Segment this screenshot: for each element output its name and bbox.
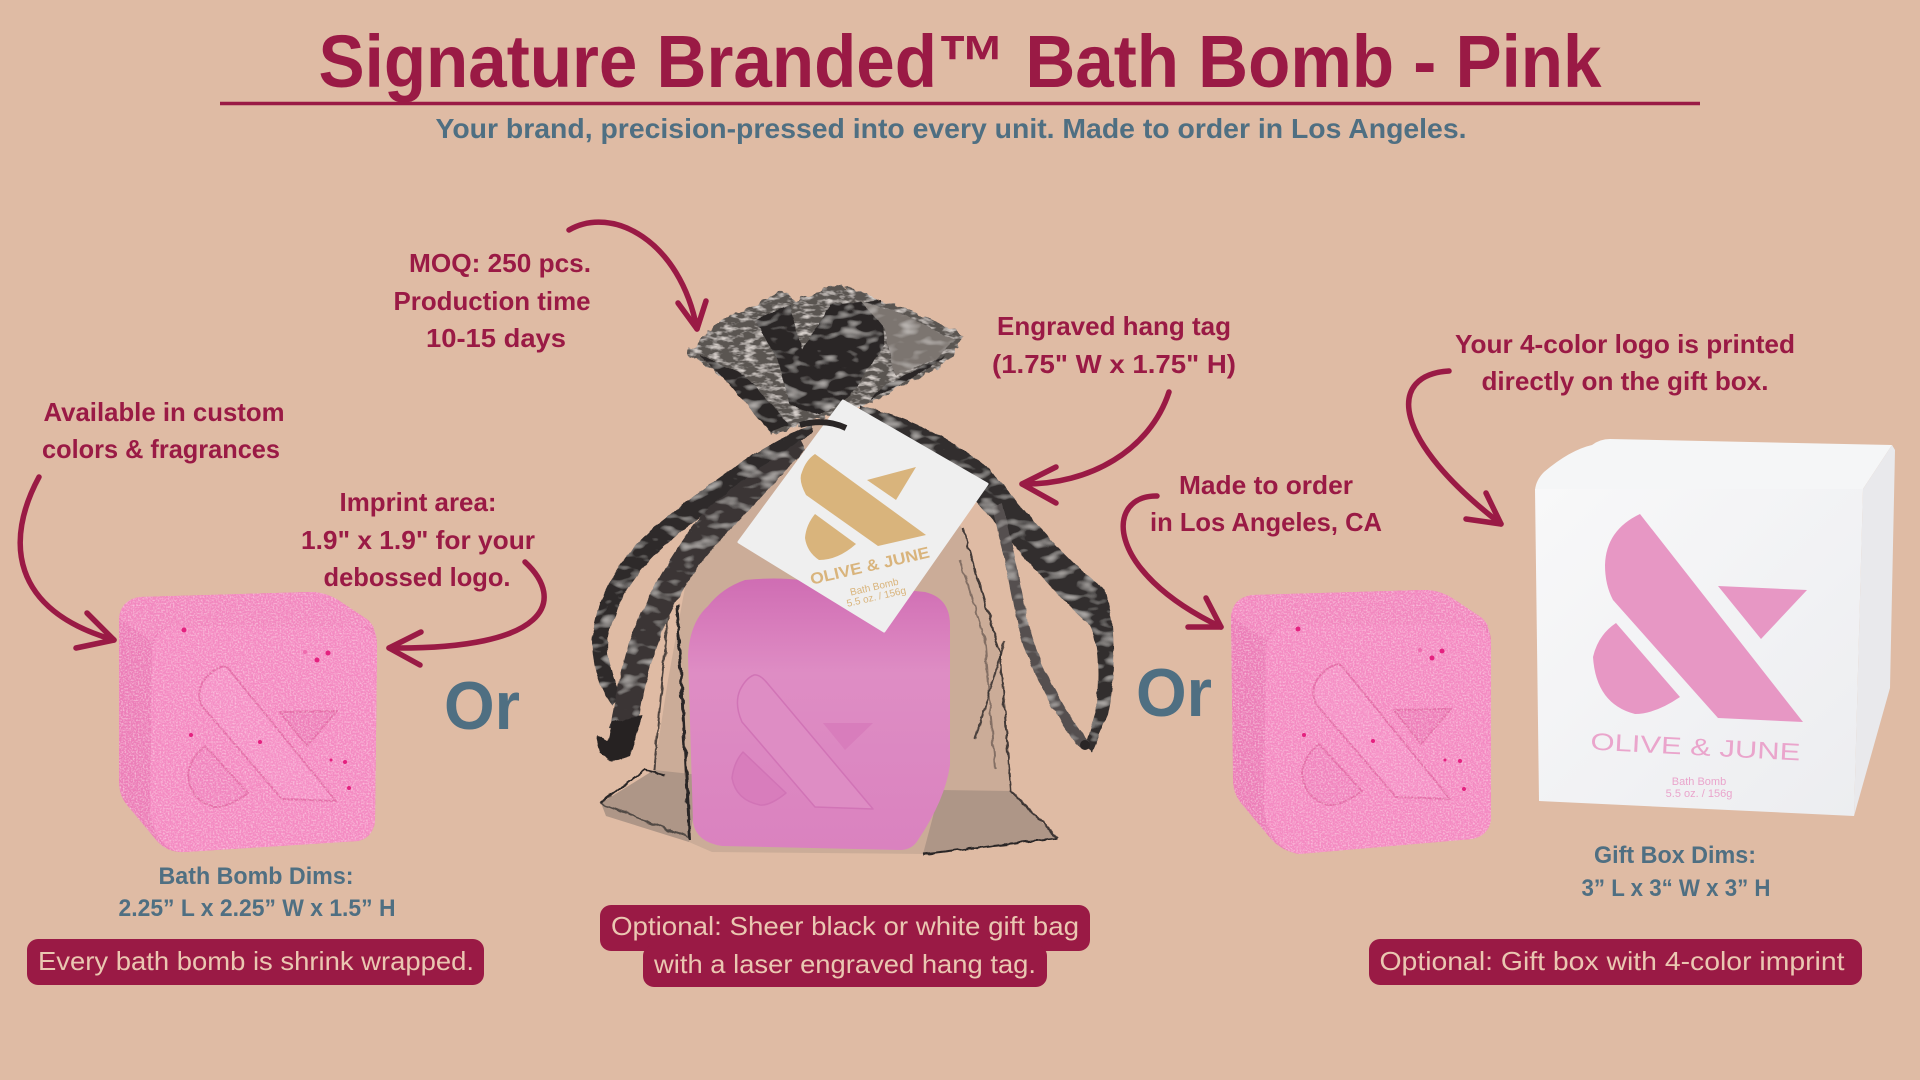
callout: optional gift box: Optional: Gift box with 4-color imprint — [1380, 946, 1845, 976]
label: 4-color logo on gift box: directly on the gift box. — [1482, 366, 1768, 396]
callout: optional gift bag: Optional: Sheer black or white gift bag — [611, 911, 1079, 941]
label: custom colors and fragrances — [42, 397, 284, 464]
label: imprint area: debossed logo. — [324, 562, 510, 592]
label: made to order: in Los Angeles, CA — [1150, 507, 1382, 537]
tag logo — [801, 454, 926, 560]
label: MOQ and production time: MOQ: 250 pcs. — [409, 248, 591, 278]
callout: shrink wrapped — [27, 939, 484, 985]
dimensions: gift box: Gift Box Dims: — [1594, 842, 1756, 869]
callout: optional gift box — [1369, 939, 1862, 985]
label: 4-color logo on gift box: Your 4-color logo is printed — [1455, 329, 1795, 359]
box logo — [1593, 514, 1807, 722]
box text: Bath Bomb — [1672, 776, 1726, 788]
gift box — [1535, 439, 1895, 816]
box text: OLIVE & JUNE — [1590, 729, 1801, 766]
box text — [1590, 729, 1801, 800]
Or text: right: Or — [1136, 655, 1212, 731]
arrow: engraved hang tag — [1022, 392, 1169, 503]
box text: 5.5 oz. / 156g — [1666, 788, 1732, 800]
bath bomb: right — [1231, 590, 1491, 854]
wrapped bath bomb inside bag — [688, 578, 950, 850]
arrow: 4-color logo to gift box — [1409, 371, 1501, 524]
bag ribbons — [592, 405, 1114, 762]
speckles — [182, 628, 351, 790]
arrow: custom colors to bath bomb — [20, 477, 114, 648]
dimensions: bath bomb — [118, 863, 396, 922]
debossed logo — [188, 666, 337, 807]
arrow: imprint area to bath bomb — [389, 562, 544, 665]
label: made to order: Made to order — [1179, 470, 1353, 500]
speckles — [1296, 626, 1466, 791]
dimensions: gift box — [1582, 842, 1770, 902]
tag text: OLIVE & JUNE — [809, 545, 932, 589]
tag hole and cord — [800, 422, 846, 428]
tag text — [809, 545, 932, 610]
label: made to order — [1150, 470, 1382, 537]
Or text: left: Or — [444, 668, 520, 744]
debossed logo — [1302, 664, 1451, 805]
gift bag with bath bomb and hang tag — [592, 284, 1114, 854]
callout: shrink wrapped: Every bath bomb is shrink wrapped. — [38, 946, 474, 976]
label: imprint area: Imprint area: — [340, 487, 496, 517]
label: MOQ and production time: Production time — [394, 286, 590, 316]
arrow: MOQ to gift bag — [569, 222, 706, 329]
sheer bag body — [601, 419, 1058, 854]
dimensions: bath bomb: 2.25” L x 2.25” W x 1.5” H — [118, 895, 396, 922]
title: Signature Branded™ Bath Bomb - Pink — [318, 20, 1602, 103]
bath bomb: left — [119, 592, 377, 852]
label: imprint area — [301, 487, 535, 592]
bag gathered top — [686, 284, 965, 435]
bag bomb debossed logo — [732, 675, 873, 809]
dimensions: bath bomb: Bath Bomb Dims: — [158, 863, 354, 890]
callout: optional gift bag — [600, 905, 1090, 987]
label: engraved hang tag — [992, 311, 1236, 379]
label: custom colors and fragrances: Available in custom — [44, 397, 284, 427]
label: MOQ and production time: 10-15 days — [426, 323, 566, 353]
label: MOQ and production time — [394, 248, 591, 353]
label: engraved hang tag: Engraved hang tag — [997, 311, 1231, 341]
arrow: made to order — [1123, 496, 1221, 627]
label: engraved hang tag: (1.75" W x 1.75" H) — [992, 349, 1236, 379]
callout: optional gift bag: with a laser engraved hang tag. — [653, 949, 1036, 979]
hang tag — [739, 401, 987, 631]
title underline — [220, 102, 1700, 105]
tag text: 5.5 oz. / 156g — [846, 585, 907, 610]
label: 4-color logo on gift box — [1455, 329, 1795, 396]
subtitle: Your brand, precision-pressed into every unit. Made to order in Los Angeles. — [436, 113, 1466, 144]
label: custom colors and fragrances: colors & fragrances — [42, 434, 280, 464]
dimensions: gift box: 3” L x 3“ W x 3” H — [1582, 875, 1770, 902]
label: imprint area: 1.9" x 1.9" for your — [301, 525, 535, 555]
tag text: Bath Bomb — [849, 577, 900, 598]
